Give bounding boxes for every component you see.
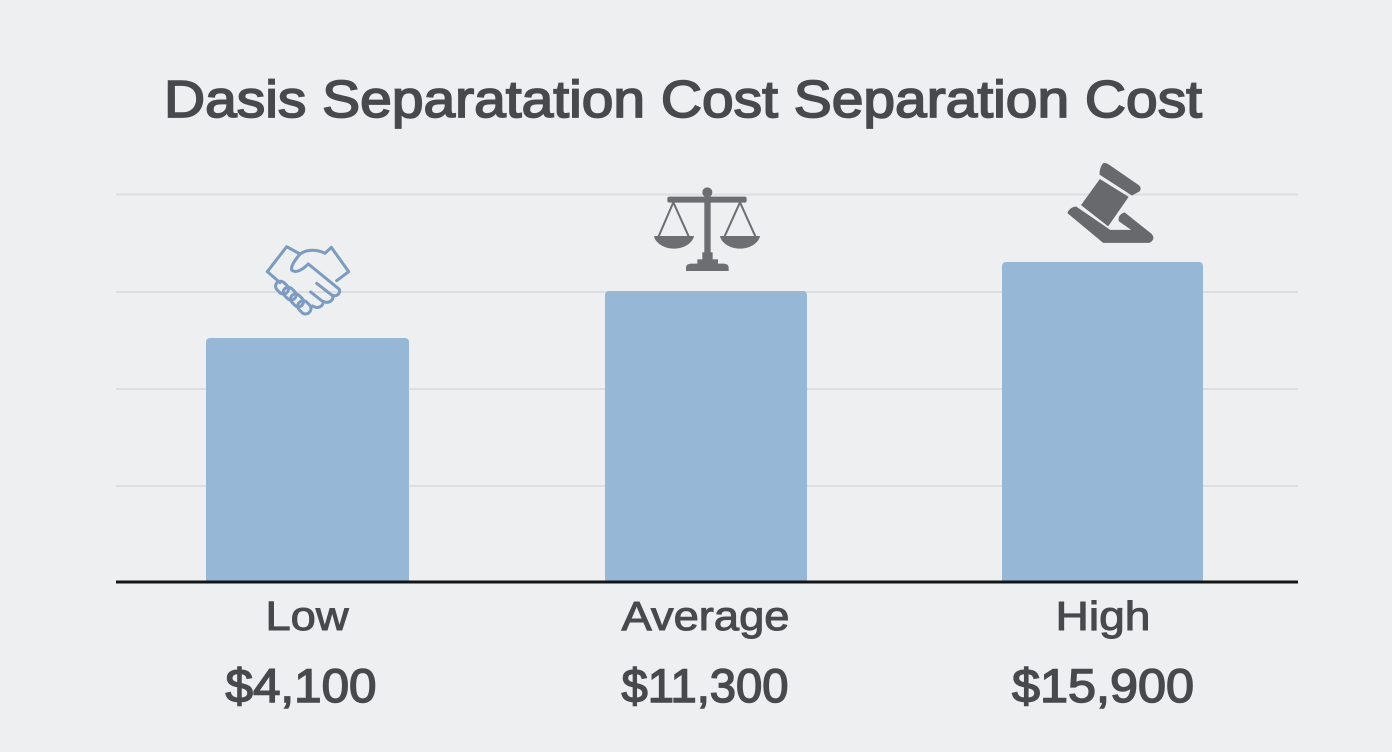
value: low: $4,100 bbox=[226, 659, 376, 712]
label: high: High bbox=[1056, 593, 1150, 639]
icon: handshake bbox=[267, 247, 349, 316]
bar: average bbox=[605, 291, 807, 581]
label: average: Average bbox=[622, 593, 790, 639]
bar chart bbox=[116, 262, 1298, 584]
label: low: Low bbox=[266, 593, 349, 639]
axis line bbox=[116, 580, 1298, 584]
icon: gavel bbox=[1068, 163, 1153, 242]
icon: scales of justice bbox=[654, 187, 760, 271]
bar: high bbox=[1002, 262, 1203, 581]
title: Dasis Separatation Cost Separation Cost bbox=[164, 71, 1203, 129]
bar: low bbox=[206, 338, 409, 581]
value: high: $15,900 bbox=[1012, 659, 1194, 712]
value: average: $11,300 bbox=[622, 659, 788, 712]
